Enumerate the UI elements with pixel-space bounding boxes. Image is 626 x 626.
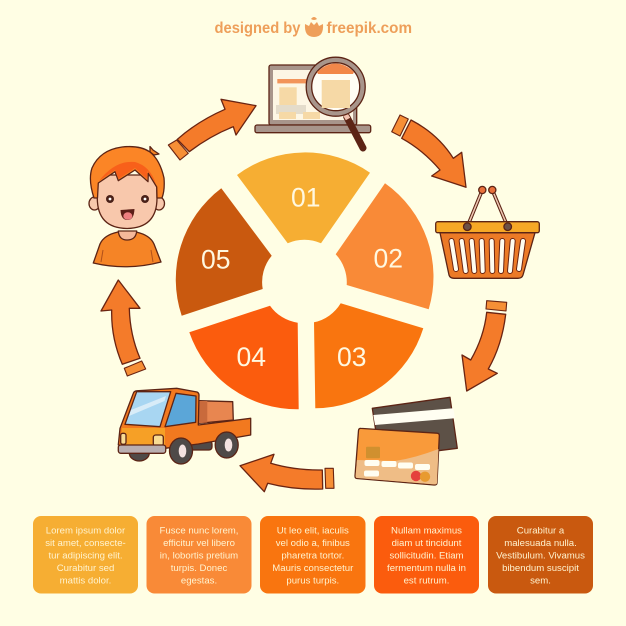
text card 1: tur adipiscing elit.	[48, 550, 123, 562]
segment 02: 02	[374, 244, 403, 274]
text card 3: purus turpis.	[286, 576, 339, 586]
text card 5: bibendum suscipit	[502, 563, 579, 574]
text card 5	[488, 516, 593, 594]
text card 2: egestas.	[181, 576, 217, 586]
text card 1: sit amet, consecte-	[45, 538, 126, 549]
heading: designed by freepik.com	[214, 17, 412, 37]
segment 05	[176, 188, 272, 316]
text card 2: Fusce nunc lorem,	[160, 526, 238, 536]
arrow: person to laptop	[168, 99, 256, 160]
arrow: basket to cards	[462, 301, 507, 391]
text card 4: sollicitudin. Etiam	[389, 550, 464, 562]
text card 4: Nullam maximus	[391, 526, 462, 536]
icon: shopping basket	[436, 186, 539, 278]
segment 05: 05	[201, 244, 230, 274]
arrow: laptop to basket	[392, 115, 466, 187]
text card 2: efficitur vel libero	[163, 538, 235, 549]
text card 5: malesuada nulla.	[504, 538, 577, 549]
arrow: cards to truck	[240, 454, 334, 492]
text card 5: Vestibulum. Vivamus	[496, 550, 585, 562]
arrow: truck to person	[101, 280, 146, 376]
text card 1: Lorem ipsum dolor	[46, 526, 126, 536]
text card 5: Curabitur a	[517, 526, 565, 536]
icon: smiling person	[89, 146, 164, 267]
text card 1: Curabitur sed	[57, 563, 114, 574]
pie chart: five segments	[176, 152, 433, 409]
heading: designed by freepik.com: designed by	[214, 20, 301, 37]
text card 5: sem.	[530, 576, 551, 586]
segment 03: 03	[337, 342, 366, 372]
text card 1	[33, 516, 138, 594]
text card 2	[146, 516, 252, 594]
text card 3: Mauris consectetur	[272, 563, 354, 574]
text card 2: in, lobortis pretium	[160, 550, 238, 562]
segment 02	[336, 183, 433, 309]
heading: designed by freepik.com: freepik.com	[326, 20, 412, 37]
text card 3: pharetra tortor.	[281, 550, 344, 562]
segment 04: 04	[237, 342, 266, 372]
segment 04	[189, 306, 299, 409]
text card 3: Ut leo elit, iaculis	[277, 526, 349, 536]
text card 2: turpis. Donec	[171, 563, 227, 574]
text card 4: fermentum nulla in	[387, 563, 466, 574]
text card 4: diam ut tincidunt	[392, 538, 462, 549]
text card 3: vel odio a, finibus	[276, 538, 350, 549]
segment 03	[314, 303, 423, 408]
segment 01	[237, 152, 370, 243]
icon: delivery truck	[118, 388, 251, 464]
icon: laptop with magnifying glass	[255, 57, 371, 148]
text card 4	[374, 516, 479, 594]
icon: credit cards	[355, 397, 457, 485]
text card 3	[260, 516, 366, 594]
segment 01: 01	[291, 182, 320, 212]
text card 1: mattis dolor.	[60, 576, 111, 586]
text card 4: est rutrum.	[404, 576, 449, 586]
